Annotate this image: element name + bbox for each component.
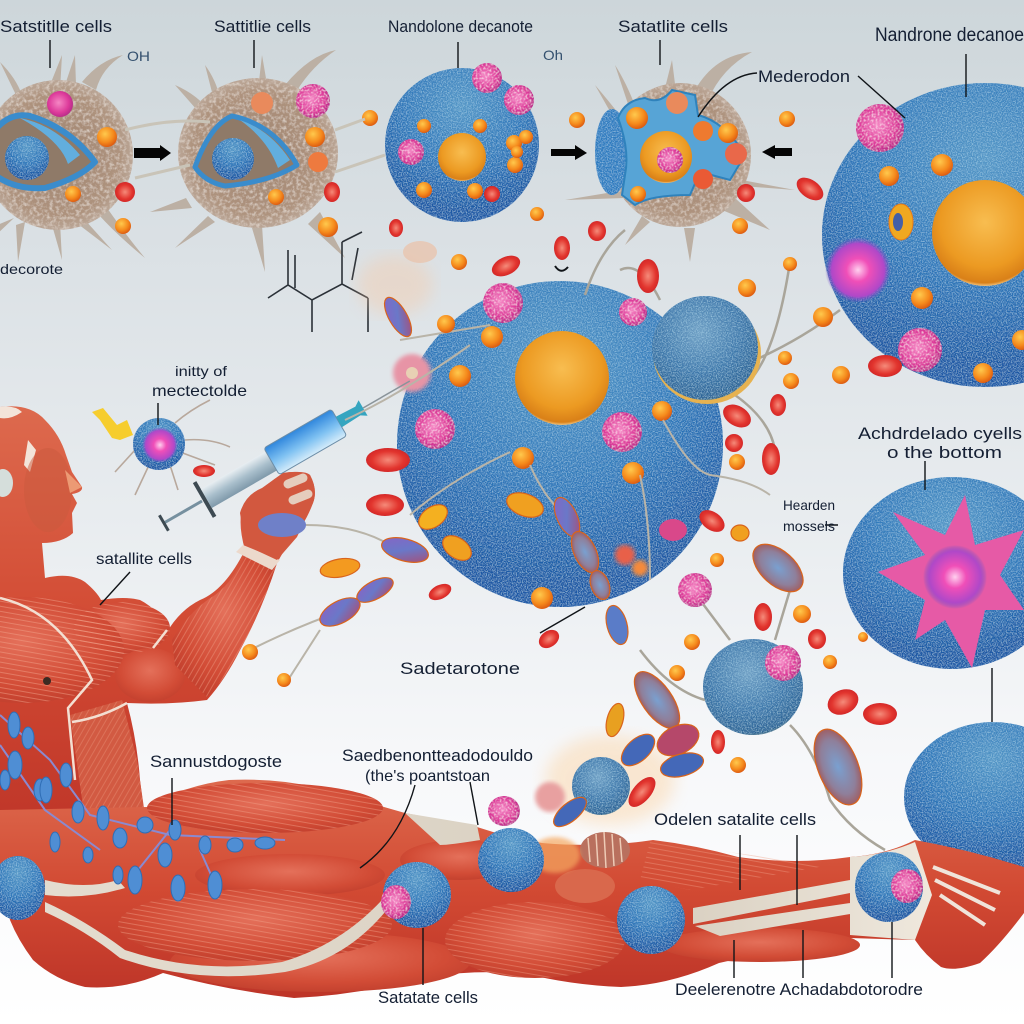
processes	[640, 590, 885, 850]
label: the's poantstoan: (the's poantstoan	[365, 768, 490, 785]
liquid chamber	[264, 409, 347, 475]
lightning bolt	[92, 408, 133, 440]
orange tissue	[555, 869, 615, 903]
nucleus	[5, 136, 49, 180]
cell body	[133, 418, 185, 470]
tendons	[45, 813, 932, 976]
nucleus	[640, 131, 692, 183]
processes	[585, 230, 840, 450]
block stripes	[588, 832, 622, 868]
chest muscle	[0, 597, 124, 703]
label: satellite cells at arm: satallite cells	[96, 551, 192, 568]
sphere	[703, 639, 803, 735]
pink core	[142, 427, 178, 463]
deltoid muscle	[74, 602, 170, 654]
label: top cell 1: Satstitlle cells	[0, 17, 112, 36]
ear	[0, 469, 13, 497]
nucleus core	[657, 147, 683, 173]
membrane highlight	[240, 120, 290, 168]
panel: right sphere with pink star	[843, 477, 1024, 669]
star core	[923, 545, 987, 609]
barrel	[201, 450, 279, 508]
bicep muscle	[115, 648, 185, 702]
chemical structure	[268, 232, 368, 332]
fuzzy pink cell	[535, 782, 565, 812]
organelles: red blood cells	[366, 219, 897, 812]
panel: legs and muscles	[0, 780, 1024, 998]
label: Saedbenontteadodouldo: Saedbenontteadodouldo	[342, 746, 533, 765]
nucleus	[932, 180, 1024, 286]
abdominal muscle	[70, 700, 145, 820]
label: Odelen satalite cells: Odelen satalite cells	[654, 810, 816, 829]
forearm muscle	[172, 550, 277, 697]
sphere	[397, 281, 723, 607]
organelles	[398, 63, 585, 221]
organelles	[251, 84, 378, 237]
chevron mark above central sphere	[555, 266, 568, 271]
palm	[240, 472, 315, 560]
blue crescent	[595, 109, 629, 195]
label: infinity of: initty of	[175, 363, 227, 379]
processes	[115, 400, 230, 495]
panel: central large sphere	[393, 281, 723, 609]
glow: molecule reaction	[357, 255, 433, 315]
ankle pink core	[891, 869, 923, 903]
spikes	[0, 55, 145, 262]
nucleus	[438, 133, 486, 181]
sphere	[843, 477, 1024, 669]
organelles: capsule chains	[315, 293, 872, 832]
abdominal fibres	[70, 700, 145, 820]
yellow rim glow	[653, 302, 761, 404]
thumb capsule	[258, 513, 306, 537]
sphere at left edge	[0, 856, 45, 920]
calf fibres	[445, 902, 625, 978]
label: top cell 4: Satatlite cells	[618, 17, 728, 36]
sphere on ankle	[855, 852, 923, 922]
squiggle fragment	[403, 241, 437, 263]
lower thigh belly	[170, 932, 470, 992]
upper thigh fibres	[147, 783, 383, 833]
label: mectectolde: mectectolde	[152, 383, 247, 400]
organelles	[793, 104, 1024, 383]
arrow: large cell to cell 4	[762, 145, 792, 159]
label: Nandolone decanote: Nandolone decanote	[388, 17, 533, 36]
thigh pink core	[381, 885, 411, 919]
cell body	[178, 78, 338, 228]
red cell	[193, 465, 215, 477]
blue membrane web	[618, 90, 745, 205]
sphere	[822, 83, 1024, 387]
flange	[195, 482, 215, 517]
cell body	[609, 83, 751, 227]
label: Hearden: Hearden	[783, 497, 835, 513]
arrow: cell 1 to cell 2	[134, 145, 171, 161]
glow: lower chain	[545, 735, 675, 825]
leg silhouette	[0, 780, 1024, 998]
sphere on knee	[478, 828, 544, 892]
bottom chain of cells	[0, 757, 923, 954]
panel: small sphere beside central cell	[585, 230, 840, 450]
spikes	[565, 52, 795, 262]
nipple	[43, 677, 51, 685]
striped muscle block	[580, 832, 630, 868]
label: Satatate cells: Satatate cells	[378, 988, 478, 1007]
panel: syringe	[154, 364, 420, 540]
panel: large top-right sphere	[793, 83, 1024, 387]
sphere	[652, 296, 758, 400]
panel: muscular figure	[0, 406, 315, 850]
knee belly	[400, 840, 520, 880]
sphere on thigh with pink core	[383, 862, 451, 928]
sphere on calf	[617, 886, 685, 954]
tendons	[0, 598, 167, 780]
shin belly	[660, 928, 860, 962]
connecting processes	[250, 325, 770, 680]
panel: top-row blue sphere	[385, 63, 585, 222]
cell body	[0, 80, 133, 230]
organelles	[47, 91, 135, 234]
star cell	[878, 495, 1024, 668]
plunger rod	[164, 501, 202, 523]
panel: top-row cell 2	[125, 50, 385, 272]
upper calf fibres	[640, 842, 830, 890]
panel: small activated cell	[92, 400, 230, 495]
nerve network	[0, 712, 285, 901]
foot tendon lines	[933, 867, 1000, 925]
label: o the bottom: o the bottom	[887, 443, 1002, 462]
big thigh belly	[118, 889, 392, 961]
face tone	[24, 448, 72, 532]
label: Sannustdogoste: Sannustdogoste	[150, 752, 282, 771]
torso fibres	[0, 597, 124, 703]
shoulder fibres	[74, 602, 170, 654]
label: Oh: Oh	[543, 47, 563, 63]
nucleus	[212, 138, 254, 180]
fingers	[288, 478, 308, 500]
torso and arm silhouette	[0, 406, 315, 850]
panel: top-row cell 4	[565, 52, 795, 262]
needle	[363, 381, 410, 408]
pink spot	[765, 645, 801, 681]
nucleus membrane	[195, 116, 297, 186]
thigh fibres	[118, 889, 392, 961]
nucleus membrane	[0, 115, 95, 188]
hand gripping syringe	[240, 472, 315, 560]
calf belly	[445, 902, 625, 978]
membrane highlight	[20, 118, 80, 164]
label: Deelerenotre Achadabdotorodre: Deelerenotre Achadabdotorodre	[675, 980, 923, 999]
pink cell above knee	[488, 796, 520, 826]
tissue glow	[530, 837, 580, 873]
wrist tendon	[236, 545, 280, 570]
mid thigh belly	[195, 854, 385, 896]
nose	[65, 470, 82, 493]
nucleus	[515, 331, 609, 425]
organelles: free floating orange	[242, 254, 868, 773]
arm fibres	[172, 550, 277, 697]
spikes	[150, 50, 345, 272]
sphere	[385, 68, 539, 222]
label: Mederodon: Mederodon	[758, 67, 850, 86]
processes	[125, 119, 385, 178]
panel: bottom-right sphere	[904, 722, 1024, 872]
label: Achdrdelado cyells: Achdrdelado cyells	[858, 424, 1022, 443]
arrow: sphere to cell 4	[551, 145, 587, 160]
label: mossels: mossels	[783, 518, 835, 534]
plunger end	[159, 515, 168, 531]
upper thigh belly	[147, 783, 383, 833]
label: top cell 2: Sattitlie cells	[214, 17, 311, 36]
head patches	[0, 407, 36, 472]
hub	[334, 400, 368, 430]
panel: top-row cell 1	[0, 55, 145, 262]
label: Sadetarotone: Sadetarotone	[400, 659, 520, 678]
sphere upper chain	[572, 757, 630, 815]
organelles	[393, 283, 672, 609]
panel: lower-right sphere with processes	[640, 590, 885, 850]
label: OH: OH	[127, 48, 150, 64]
label: medcorote: decorote	[0, 261, 63, 277]
organelles	[588, 92, 795, 241]
